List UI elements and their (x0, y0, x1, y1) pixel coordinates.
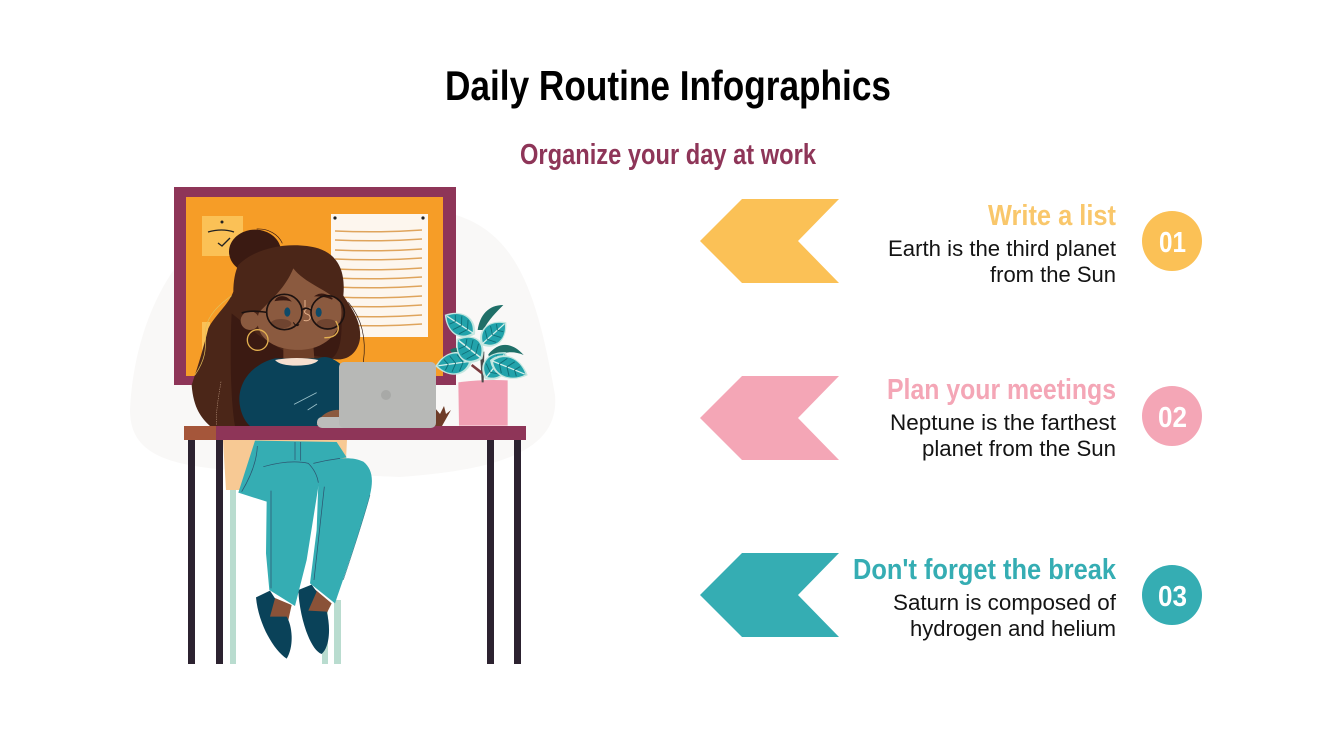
description 1: from the Sun (990, 262, 1116, 287)
number badge 3: 03 (1158, 581, 1187, 613)
title: Daily Routine Infographics (445, 62, 891, 109)
heading 2: Plan your meetings (887, 374, 1116, 406)
sticky note (202, 216, 243, 256)
glasses (242, 294, 344, 330)
leaves (439, 305, 481, 344)
woman upper body (192, 229, 364, 426)
laptop and plant (317, 305, 532, 428)
number badge 1 (1142, 211, 1202, 271)
description 2: planet from the Sun (922, 436, 1116, 461)
hair and bun (192, 229, 364, 426)
heading 3: Don't forget the break (853, 554, 1117, 586)
laptop (317, 362, 436, 428)
pot (458, 380, 508, 426)
description 2: Neptune is the farthest (890, 410, 1116, 435)
number badge 1: 01 (1159, 227, 1186, 259)
background blob (130, 215, 555, 477)
subtitle: Organize your day at work (520, 139, 817, 171)
right hand (435, 406, 451, 426)
sweater (239, 357, 342, 426)
illustration: woman working at desk (130, 187, 555, 664)
dark leaves (478, 305, 503, 330)
number badge 3 (1142, 565, 1202, 625)
item 1: write a list (700, 199, 1202, 287)
left leg (238, 441, 347, 606)
heading 1: Write a list (988, 200, 1116, 232)
ear and face (241, 268, 341, 350)
description 3: hydrogen and helium (910, 616, 1116, 641)
paper list (331, 214, 428, 337)
description 1: Earth is the third planet (888, 236, 1116, 261)
desk top (184, 426, 526, 440)
plant (434, 305, 532, 426)
left hand (317, 410, 342, 426)
jeans and shoes (238, 441, 372, 659)
arrow 3 (700, 553, 839, 637)
description 3: Saturn is composed of (893, 590, 1117, 615)
arrow 2 (700, 376, 839, 460)
item 2: plan your meetings (700, 374, 1202, 461)
cork board (174, 187, 456, 385)
right leg (310, 458, 372, 603)
item 3: don't forget the break (700, 553, 1202, 641)
neck (283, 345, 314, 359)
earrings (247, 321, 338, 350)
number badge 2: 02 (1158, 402, 1187, 434)
shoes and ankles (256, 585, 332, 659)
number badge 2 (1142, 386, 1202, 446)
desk legs (188, 439, 521, 664)
arrow 1 (700, 199, 839, 283)
chair (223, 440, 347, 664)
